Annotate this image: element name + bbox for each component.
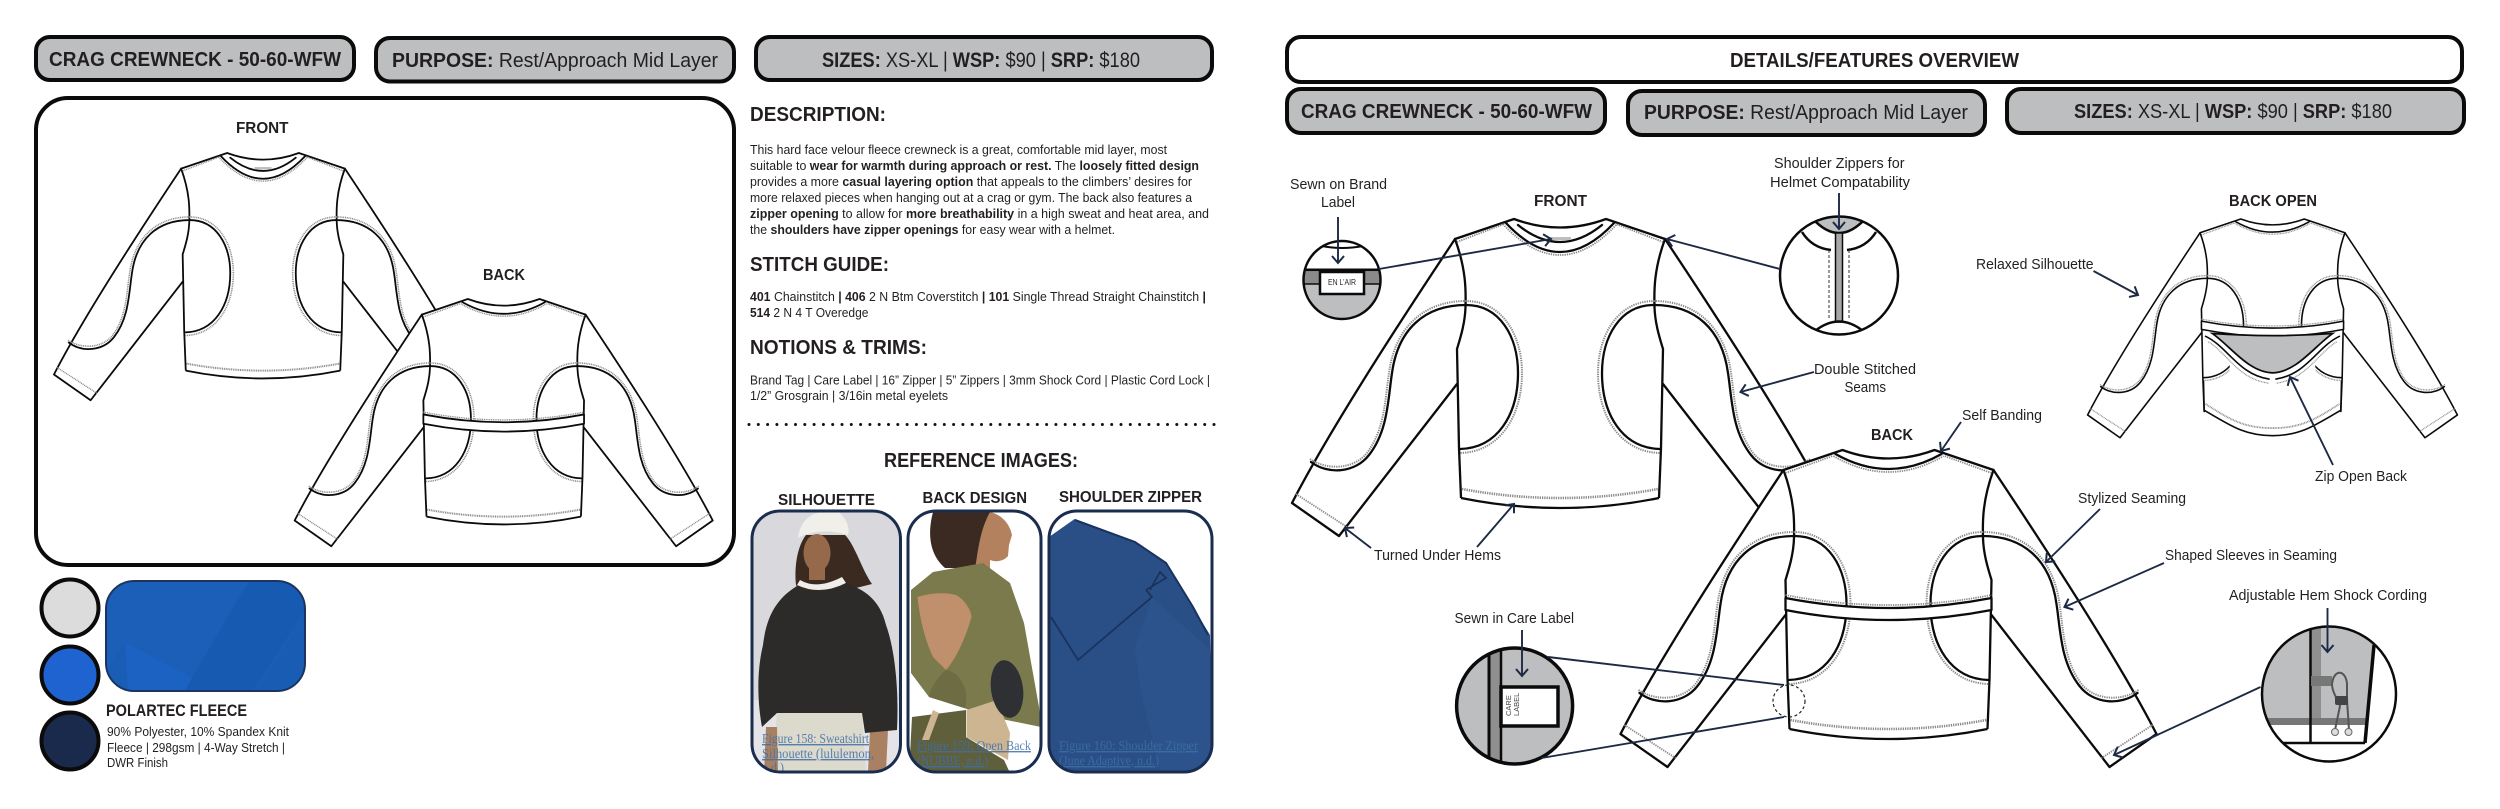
callout: shoulder zippers: Helmet Compatability (1770, 174, 1910, 191)
header: purpose (1628, 91, 1985, 135)
callout: zip open back (2290, 377, 2407, 485)
callout: zip open back: Zip Open Back (2315, 468, 2407, 485)
detail circle: brand label (1300, 240, 1384, 324)
reference: silhouette: Silhouette (lululemon, (762, 747, 874, 762)
callout: adjustable hem shock cording: Adjustable Hem Shock Cording (2229, 587, 2427, 604)
text block: description (750, 142, 1209, 237)
callout: sewn on brand label: Label (1321, 194, 1355, 211)
reference: silhouette (752, 492, 901, 776)
detail circle: shoulder zipper (1780, 210, 1898, 334)
header: sizes and prices: SIZES: XS-XL | WSP: $90 | SRP: $180 (2074, 101, 2392, 123)
callout: stylized seaming (2046, 490, 2186, 562)
detail circle: care label (1457, 640, 1573, 770)
fabric specification (107, 724, 289, 770)
text block: description: provides a more casual layering option that appeals to the climbers’ desires for (750, 174, 1193, 189)
reference: silhouette: n.d.) (762, 761, 784, 776)
text block: description: the shoulders have zipper openings for easy wear with a helmet. (750, 222, 1115, 237)
fabric specification: DWR Finish (107, 755, 168, 770)
reference: back design: Figure 159: Open Back (917, 739, 1031, 754)
callout: self banding (1941, 407, 2042, 451)
reference: shoulder zipper: Figure 160: Shoulder Zipper (1059, 739, 1198, 754)
callout: double stitched seams (1740, 361, 1916, 396)
detail circle: hem shock cord (2255, 620, 2396, 762)
callout: shoulder zippers (1667, 155, 1910, 334)
banner: details and features overview (1287, 37, 2462, 82)
text block: stitch guide (750, 289, 1206, 320)
callout: relaxed silhouette (1976, 256, 2138, 295)
text block: description: suitable to wear for warmth during approach or rest. The loosely fitted design (750, 158, 1199, 173)
callout: sewn on brand label: Sewn on Brand (1290, 176, 1387, 193)
header: style name: CRAG CREWNECK - 50-60-WFW (49, 49, 341, 71)
callout: double stitched seams: Double Stitched (1814, 361, 1916, 378)
header: style name (36, 37, 354, 80)
callout: sewn in care label (1454, 610, 1805, 770)
heading: notions and trims: NOTIONS & TRIMS: (750, 337, 927, 359)
fabric specification: Fleece | 298gsm | 4-Way Stretch | (107, 740, 285, 755)
callout: relaxed silhouette: Relaxed Silhouette (1976, 256, 2094, 273)
text block: description: This hard face velour fleece crewneck is a great, comfortable mid layer, most (750, 142, 1167, 157)
fabric swatch (106, 581, 305, 691)
label: front: FRONT (236, 120, 289, 137)
flat: back view (295, 299, 713, 546)
detail circle: care label: CARE (1504, 695, 1513, 716)
header: purpose (376, 38, 734, 82)
flat: large back view (1620, 450, 2156, 767)
fabric name: POLARTEC FLEECE (106, 702, 247, 720)
detail circle: brand label: EN L’AIR (1328, 278, 1356, 287)
banner: details and features overview: DETAILS/FEATURES OVERVIEW (1730, 50, 2019, 72)
reference: shoulder zipper: (June Adaptive, n.d.) (1059, 754, 1159, 769)
callout: turned under hems: Turned Under Hems (1374, 547, 1501, 564)
callout: shaped sleeves in seaming: Shaped Sleeves in Seaming (2165, 547, 2337, 564)
colour swatch: navy (42, 712, 98, 770)
reference: back design (908, 490, 1041, 773)
flat: back open view (2088, 219, 2457, 438)
reference: back design: (NUBBE, n.d.) (917, 754, 988, 769)
callout: self banding: Self Banding (1962, 407, 2042, 424)
callout: stylized seaming: Stylized Seaming (2078, 490, 2186, 507)
flat: large front view (1292, 219, 1828, 536)
panel: technical flats (36, 98, 734, 565)
label: front: FRONT (1534, 193, 1588, 210)
header: style name (1287, 89, 1605, 133)
reference: back design: BACK DESIGN (922, 490, 1027, 507)
header: style name: CRAG CREWNECK - 50-60-WFW (1301, 101, 1592, 123)
heading: stitch guide: STITCH GUIDE: (750, 254, 889, 276)
text block: description: zipper opening to allow for more breathability in a high sweat and heat area, and (750, 206, 1209, 221)
callout: sewn on brand label (1290, 176, 1551, 324)
detail circle: care label: LABEL (1512, 693, 1521, 716)
reference: shoulder zipper: SHOULDER ZIPPER (1059, 489, 1202, 506)
flat: front view (54, 153, 472, 400)
header: sizes and prices: SIZES: XS-XL | WSP: $90 | SRP: $180 (822, 49, 1140, 72)
text block: stitch guide: 514 2 N 4 T Overedge (750, 305, 868, 320)
callout: turned under hems (1345, 504, 1514, 564)
callout: adjustable hem shock cording (2114, 587, 2427, 762)
callout: double stitched seams: Seams (1844, 379, 1886, 396)
header: sizes and prices (2007, 89, 2464, 133)
colour swatch: cobalt blue (42, 646, 98, 704)
header: purpose: PURPOSE: Rest/Approach Mid Layer (1644, 102, 1968, 124)
label: back: BACK (483, 267, 526, 284)
label: back: BACK (1871, 427, 1914, 444)
reference: shoulder zipper (1049, 489, 1213, 773)
text block: notions and trims: Brand Tag | Care Label | 16” Zipper | 5” Zippers | 3mm Shock Cord | Plastic Cord Lock | (750, 372, 1210, 388)
callout: shoulder zippers: Shoulder Zippers for (1774, 155, 1904, 172)
text block: notions and trims: 1/2” Grosgrain | 3/16in metal eyelets (750, 388, 948, 403)
left page (36, 37, 1216, 776)
callout: shaped sleeves in seaming (2064, 547, 2337, 607)
colour swatch: light grey (42, 580, 98, 636)
heading: description: DESCRIPTION: (750, 104, 886, 126)
text block: stitch guide: 401 Chainstitch | 406 2 N Btm Coverstitch | 101 Single Thread Straight Chainstitch | (750, 289, 1206, 304)
reference: silhouette: Figure 158: Sweatshirt (762, 732, 869, 747)
header: purpose: PURPOSE: Rest/Approach Mid Layer (392, 50, 718, 72)
text block: notions and trims (750, 372, 1210, 403)
right page (1287, 37, 2464, 770)
text block: description: more relaxed pieces when hanging out at a crag or gym. The back also features a (750, 190, 1193, 205)
callout: sewn in care label: Sewn in Care Label (1454, 610, 1574, 627)
fabric specification: 90% Polyester, 10% Spandex Knit (107, 724, 289, 739)
heading: reference images: REFERENCE IMAGES: (884, 450, 1078, 472)
header: sizes and prices (756, 37, 1212, 80)
label: back open: BACK OPEN (2229, 193, 2317, 210)
reference: silhouette: SILHOUETTE (778, 492, 875, 509)
